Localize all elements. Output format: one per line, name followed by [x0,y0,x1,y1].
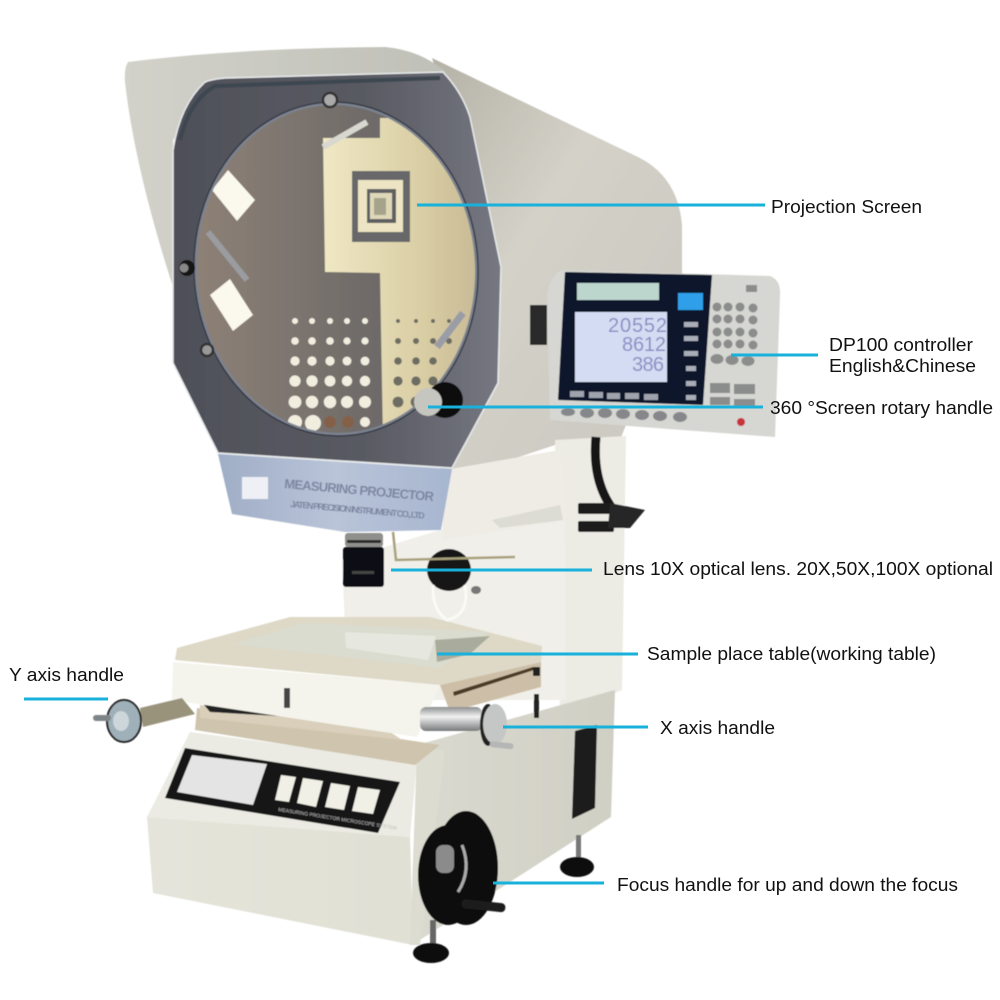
glass clips [208,122,463,347]
main LCD: 386 [632,354,664,376]
bezel screws [179,93,337,356]
controller bracket [530,305,547,345]
focus handwheel [418,811,506,925]
label: lens: Lens 10X optical lens. 20X,50X,100X optional [603,559,993,579]
dark dot grid [393,319,452,407]
blue button [678,293,703,310]
base control panel: MEASURING PROJECTOR MICROSCOPE SYSTEM [278,807,397,832]
table top [175,617,542,685]
cable and connectors [578,437,645,532]
label: DP100 controller [731,335,976,376]
label: Projection Screen: Projection Screen [771,197,922,217]
table front [172,662,440,737]
neck housing [442,450,566,540]
projection screen [185,95,490,443]
left foot [413,920,449,963]
label: sample table: Sample place table(working table) [647,644,936,664]
label: focus handle: Focus handle for up and down the focus [617,875,958,895]
round keys [561,408,687,422]
controller dark face [558,272,712,405]
label: DP100 controller: English&Chinese [829,356,976,376]
target square [352,171,410,242]
bezel [173,72,501,468]
red button [737,418,745,426]
rear housing [432,58,682,470]
label: X axis handle: X axis handle [660,718,775,738]
hood [125,47,446,290]
under-table beige carriage [195,708,440,765]
rotary knob [414,382,463,418]
base side [412,690,615,945]
column front [342,520,566,700]
label: DP100 controller: DP100 controller [829,335,973,355]
main LCD: 8612 [622,334,666,356]
measuring projector machine [93,47,780,963]
label: screen rotary handle: 360 °Screen rotary handle [770,398,993,418]
bezel lower plate: MEASURING PROJECTOR [284,476,435,504]
upper LCD [577,283,659,300]
lens [343,533,384,587]
DP100 controller [547,270,780,437]
side buttons [684,322,698,400]
label: Y axis handle [9,665,124,699]
table right side [440,662,541,712]
white squares [212,170,255,221]
bezel lower plate: JATEN PRECISION INSTRUMENT CO., LTD [290,499,426,521]
base front slanted panel [147,732,417,837]
base control panel [165,748,400,833]
Y axis handle [93,698,195,742]
bezel lower plate [218,454,452,532]
right side corner [410,750,445,945]
keypad [710,285,758,406]
main LCD: 20552 [608,315,667,337]
column round port [393,532,515,620]
table lever [284,688,290,708]
main LCD [575,312,667,382]
X axis handle [420,704,514,749]
screen cream pattern [322,117,476,425]
glass plate [232,623,490,668]
column side panel [555,436,626,715]
side display slot [572,725,597,819]
label: Y axis handle: Y axis handle [9,665,124,685]
bottom LCD buttons [570,391,658,400]
base front lower panel [147,817,413,945]
bezel inner rim [180,78,440,140]
right foot [560,835,594,877]
white dot grid [288,318,371,431]
